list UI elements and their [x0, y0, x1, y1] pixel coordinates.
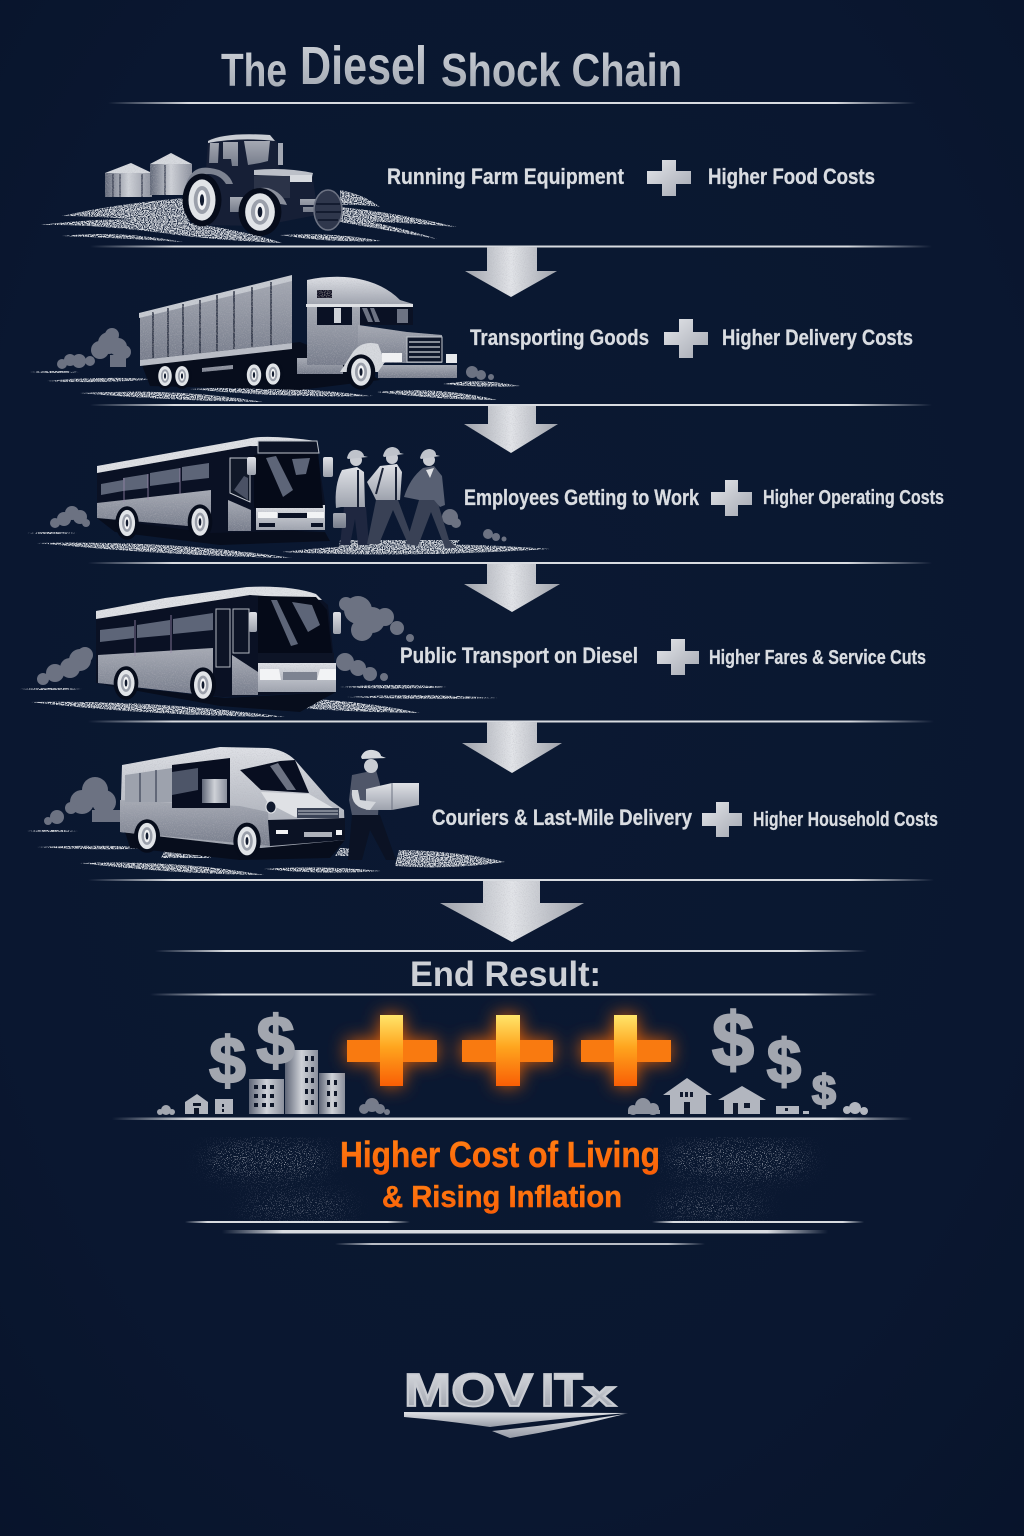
- icon: shrubs: [50, 506, 506, 542]
- illustration: road streaks: [27, 532, 550, 558]
- arrow 4: [462, 722, 562, 773]
- label: higher delivery costs: Higher Delivery Costs: [722, 325, 913, 350]
- icon: delivery van: [120, 747, 345, 860]
- texture: dusty speckle: [206, 1144, 810, 1214]
- heading: end result: End Result:: [410, 955, 601, 994]
- icon: background trees: [57, 328, 494, 380]
- logo: MOV ITx: MOV: [404, 1364, 533, 1416]
- icon: grain silos: [105, 153, 192, 197]
- label: higher fares and service cuts: Higher Fares & Service Cuts: [709, 647, 926, 669]
- arrow 3: [464, 564, 560, 612]
- label: running farm equipment: Running Farm Equipment: [387, 164, 625, 189]
- arrow 1: [465, 247, 557, 297]
- label: higher household costs: Higher Household Costs: [753, 809, 938, 831]
- icon: dollar signs right: $: [767, 1028, 801, 1097]
- illustration: farm hills: [40, 190, 457, 243]
- icon: bushes: [44, 777, 120, 825]
- callout: higher cost of living: Higher Cost of Living: [340, 1134, 660, 1175]
- icon: left shrubs: [157, 1098, 390, 1115]
- icon: right houses: [628, 1078, 868, 1115]
- label: couriers and last-mile delivery: Couriers & Last-Mile Delivery: [432, 805, 693, 830]
- icon: semi truck: [139, 275, 457, 390]
- icon: dollar signs left: $: [256, 1002, 295, 1079]
- illustration: road streaks: [30, 371, 520, 402]
- label: higher operating costs: Higher Operating Costs: [763, 487, 944, 509]
- label: employees getting to work: Employees Getting to Work: [464, 485, 700, 510]
- arrow 2: [464, 406, 558, 453]
- icon: plus: [664, 319, 708, 358]
- icon: tractor: [182, 134, 342, 236]
- icon: plus: [702, 802, 742, 837]
- icon: left skyline: [185, 1050, 345, 1114]
- icon: city bus: [97, 437, 333, 545]
- label: public transport on diesel: Public Transport on Diesel: [400, 643, 638, 668]
- worker one: [333, 450, 369, 545]
- label: higher food costs: Higher Food Costs: [708, 164, 875, 189]
- worker two: [367, 447, 420, 544]
- logo: MOV ITx: x: [583, 1373, 616, 1414]
- icon: plus: [647, 160, 691, 196]
- end result panel: skyline, dollars and plus signs: [157, 998, 868, 1115]
- illustration: road streaks: [27, 830, 505, 875]
- logo: MOV ITx: [404, 1364, 628, 1438]
- title: [221, 36, 682, 96]
- row 3: employees getting to work: [27, 437, 944, 558]
- icon: dollar signs left: $: [209, 1023, 246, 1097]
- icon: coach bus: [96, 587, 341, 712]
- row 4: public transport on diesel: [20, 587, 926, 717]
- icon: dollar signs right: [712, 998, 836, 1115]
- row 5: couriers and last-mile delivery: [27, 747, 938, 875]
- label: transporting goods: Transporting Goods: [470, 325, 649, 350]
- row 1: farm equipment: [40, 134, 875, 243]
- icon: dollar signs right: $: [812, 1067, 836, 1115]
- logo: MOV ITx: IT: [541, 1364, 583, 1416]
- arrow 5: [440, 881, 584, 942]
- row 2: transporting goods: [30, 275, 913, 402]
- title: The: [221, 44, 287, 96]
- icon: three commuting workers: [333, 447, 457, 548]
- icon: dollar signs right: $: [712, 998, 754, 1083]
- illustration: road streaks: [20, 685, 498, 717]
- worker three: [404, 449, 457, 548]
- icon: dollar signs left: [209, 1002, 295, 1097]
- icon: plus: [711, 480, 752, 516]
- icon: bushes: [37, 596, 414, 685]
- icon: glowing plus signs: [347, 1015, 671, 1086]
- title: Shock Chain: [441, 44, 682, 96]
- icon: plus: [657, 639, 699, 675]
- title: Diesel: [300, 36, 427, 96]
- callout: rising inflation: & Rising Inflation: [382, 1179, 622, 1214]
- icon: courier carrying box: [348, 750, 419, 860]
